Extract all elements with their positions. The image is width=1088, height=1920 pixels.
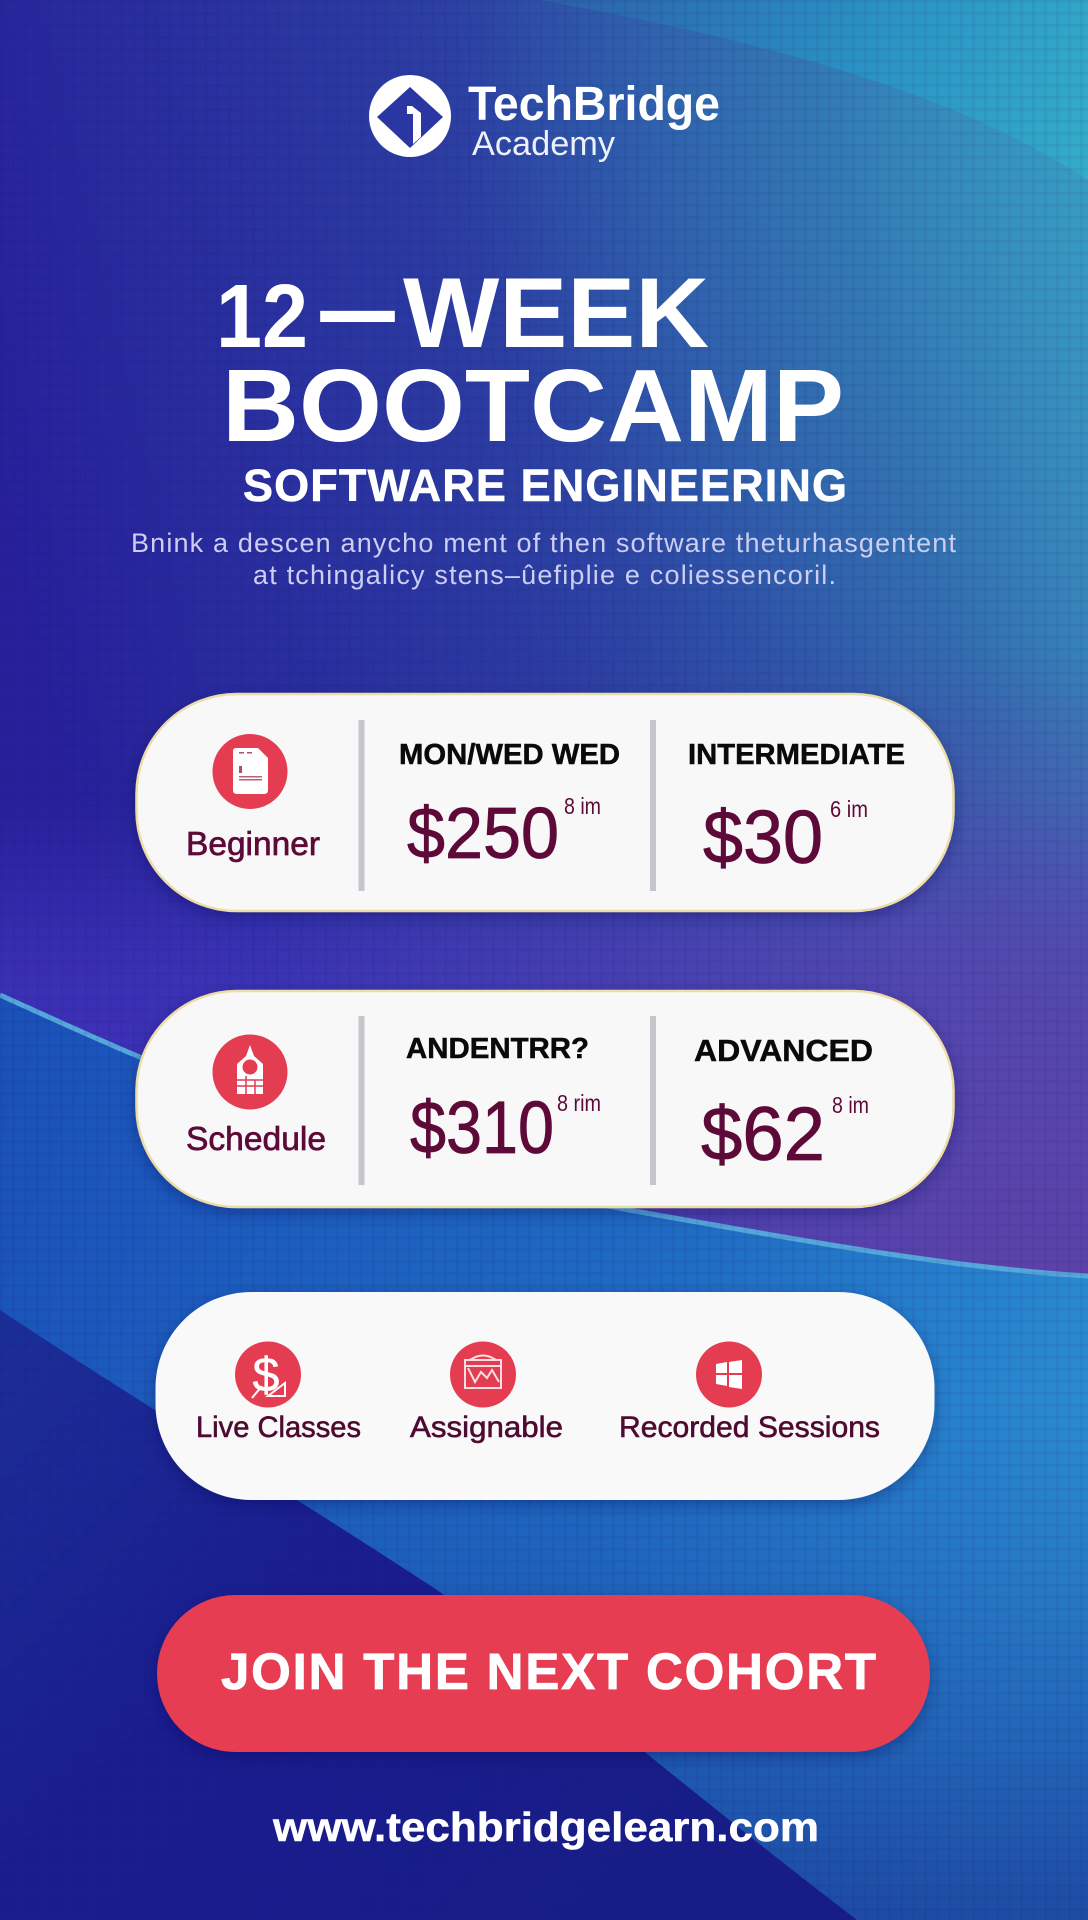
title — [216, 257, 844, 463]
panel: beginner pricing pill — [136, 694, 954, 911]
heading: schedule: MON/WED WED — [399, 739, 620, 771]
title: WEEK — [403, 257, 709, 368]
title: — — [321, 259, 394, 361]
title: 12 — [216, 267, 308, 367]
label: schedule: Schedule — [186, 1120, 326, 1157]
label: live classes: Live Classes — [196, 1411, 361, 1444]
icon: logo mark — [369, 75, 451, 157]
subtitle: SOFTWARE ENGINEERING — [243, 460, 847, 511]
icon: dollar — [235, 1342, 301, 1408]
website url: www.techbridgelearn.com — [272, 1804, 819, 1850]
price note: 8 im — [832, 1092, 869, 1118]
price: $310 — [410, 1086, 554, 1169]
label: beginner: Beginner — [186, 825, 320, 862]
panel: schedule pricing pill — [136, 991, 954, 1207]
divider — [650, 720, 656, 891]
icon: document — [212, 734, 288, 809]
call to action button — [157, 1595, 930, 1752]
price note: 8 im — [564, 793, 601, 819]
logo — [369, 75, 720, 163]
description text — [131, 528, 956, 590]
price note: 8 rim — [557, 1090, 601, 1116]
heading: advanced: ADVANCED — [694, 1033, 873, 1068]
heading: andentrr: ANDENTRR? — [406, 1033, 589, 1065]
icon: chart calendar — [450, 1342, 516, 1408]
icon: windows — [696, 1342, 762, 1408]
label: recorded sessions: Recorded Sessions — [619, 1411, 880, 1444]
panel: features pill — [156, 1292, 934, 1500]
description text: at tchingalicy stens–ûefiplie e coliessencoril. — [253, 560, 836, 590]
divider — [358, 1016, 364, 1185]
call to action button: JOIN THE NEXT COHORT — [221, 1643, 876, 1700]
title: BOOTCAMP — [222, 348, 844, 463]
price note: 6 im — [830, 796, 868, 822]
description text: Bnink a descen anycho ment of then software theturhasgentent — [131, 528, 956, 558]
price: $62 — [701, 1092, 825, 1177]
icon: dollar: $ — [253, 1349, 279, 1402]
divider — [358, 720, 364, 891]
price: $30 — [703, 795, 823, 879]
logo name: TechBridge — [468, 78, 720, 131]
label: assignable: Assignable — [410, 1411, 563, 1444]
price: $250 — [407, 794, 559, 874]
logo subtitle: Academy — [472, 125, 615, 163]
heading: intermediate: INTERMEDIATE — [688, 739, 905, 771]
icon: tower — [212, 1034, 288, 1110]
divider — [650, 1016, 656, 1185]
